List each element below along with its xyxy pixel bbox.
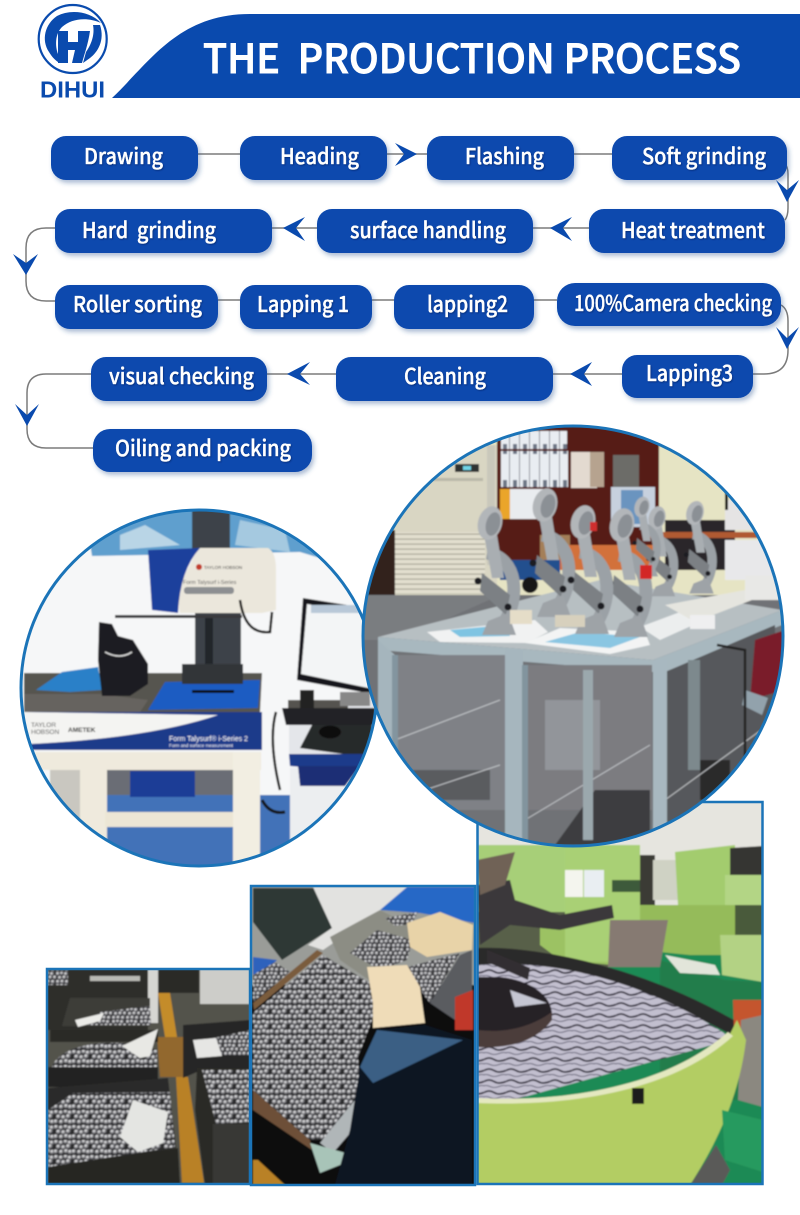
step: Heat treatment <box>589 209 785 253</box>
arrowheads <box>13 143 799 426</box>
step: Drawing <box>51 136 198 180</box>
banner shape <box>112 14 800 98</box>
step: Heading <box>240 136 387 180</box>
photo: steel balls in bins <box>46 968 250 1185</box>
step: Cleaning: Cleaning <box>404 359 486 391</box>
border <box>21 510 377 866</box>
step: Heat treatment: Heat treatment <box>621 213 765 245</box>
logo ring <box>39 5 107 73</box>
step: Hard grinding: Hard grinding <box>82 213 216 245</box>
step: Roller sorting <box>55 285 218 329</box>
photo circle: Talysurf measuring instrument: TAYLOR HOBSON <box>204 565 242 570</box>
step: surface handling <box>317 209 533 253</box>
logo swoosh upper left <box>45 12 101 62</box>
photo circle: Talysurf measuring instrument: Form Talysurf i-Series <box>183 580 237 586</box>
step: lapping2: lapping2 <box>427 287 508 319</box>
photo circle: Talysurf measuring instrument: Form and surface measurement <box>169 743 234 748</box>
step: Cleaning <box>336 357 553 401</box>
step: Drawing: Drawing <box>84 139 163 171</box>
step: lapping2 <box>394 285 534 329</box>
step: Flashing: Flashing <box>465 139 544 171</box>
step: Flashing <box>427 136 574 180</box>
title banner <box>112 14 800 98</box>
frame <box>47 969 250 1184</box>
step: Soft grinding <box>612 136 787 180</box>
photo circle: Talysurf measuring instrument <box>20 510 380 872</box>
step: 100%Camera checking <box>557 283 781 326</box>
step: surface handling: surface handling <box>350 213 506 245</box>
process flow <box>13 136 799 472</box>
border <box>363 426 783 846</box>
step: Heading: Heading <box>280 139 359 171</box>
photo circle: Talysurf measuring instrument: Form Talysurf® i-Series 2 <box>169 735 248 743</box>
logo swoosh lower right <box>83 25 102 63</box>
frame <box>478 802 762 1184</box>
step: Lapping3: Lapping3 <box>646 356 733 388</box>
photo circle: Talysurf measuring instrument: HOBSON <box>31 729 59 736</box>
step: Soft grinding: Soft grinding <box>642 139 766 171</box>
step: Lapping3 <box>622 355 753 398</box>
step: visual checking: visual checking <box>109 359 254 391</box>
step: Lapping 1 <box>240 285 372 329</box>
logo wordmark: DIHUI <box>40 76 105 102</box>
step: visual checking <box>91 357 267 401</box>
step: Hard grinding <box>55 209 272 253</box>
title: THE PRODUCTION PROCESS <box>203 27 741 85</box>
photo: sorting steel balls by hand <box>250 885 475 1185</box>
step: Roller sorting: Roller sorting <box>73 287 202 319</box>
logo letter H <box>58 31 90 63</box>
photo circle: Talysurf measuring instrument: TAYLOR <box>31 722 56 729</box>
logo: DIHUI <box>39 5 107 102</box>
frame <box>251 886 475 1185</box>
connector lines <box>26 154 788 448</box>
photo circle: microscope instruments on glass table <box>360 425 790 855</box>
step: Oiling and packing: Oiling and packing <box>115 431 291 463</box>
photo: green machine and ball tub <box>477 801 763 1185</box>
step: Lapping 1: Lapping 1 <box>257 287 349 319</box>
step: Oiling and packing <box>93 429 312 472</box>
photo circle: Talysurf measuring instrument: AMETEK <box>68 727 96 734</box>
